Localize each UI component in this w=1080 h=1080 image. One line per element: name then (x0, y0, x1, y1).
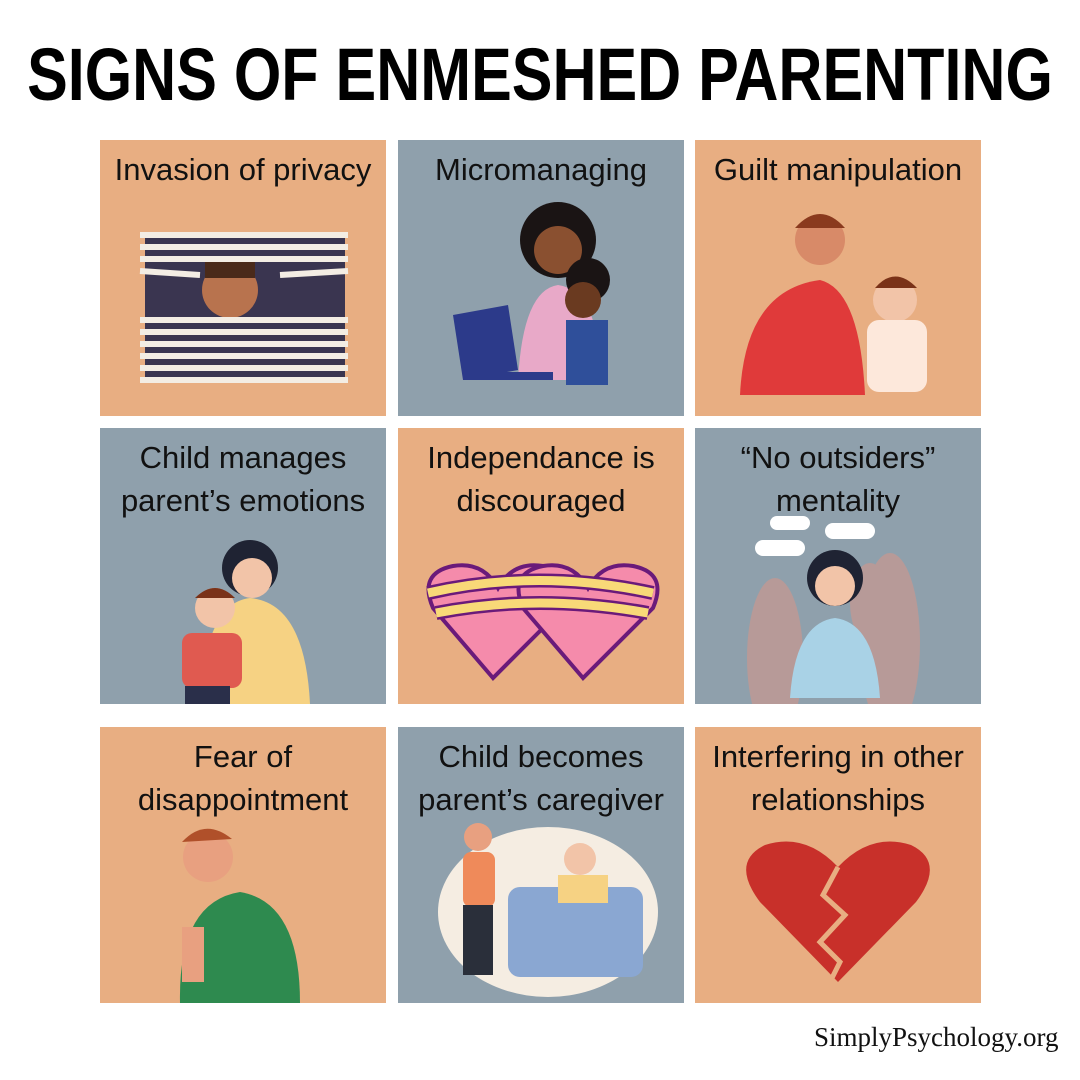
icon: broken heart (746, 842, 930, 982)
caption: Fear of (194, 739, 292, 774)
caption: discouraged (457, 483, 625, 518)
caption: Child manages (140, 440, 346, 475)
caption (741, 440, 935, 518)
caption: parent’s emotions (121, 483, 365, 518)
caption: Child becomes (438, 739, 644, 774)
icon: caregiving bed scene (438, 823, 658, 997)
caption: disappointment (138, 782, 348, 817)
caption (121, 440, 365, 518)
caption (712, 739, 964, 817)
icon: tied hearts (426, 563, 660, 681)
icon: blinds (140, 232, 348, 383)
icon: girl with shadows (747, 516, 920, 704)
caption: Interfering in other (712, 739, 964, 774)
caption: Invasion of privacy (115, 152, 371, 187)
caption (138, 739, 348, 817)
panel: guilt manipulation (695, 140, 981, 416)
panel: child manages emotions (100, 428, 386, 704)
panel: independence discouraged (398, 428, 684, 704)
caption: relationships (751, 782, 925, 817)
caption: “No outsiders” (741, 440, 935, 475)
icon: parent and child at laptop (453, 202, 610, 385)
footer: source: SimplyPsychology.org (814, 1022, 1059, 1052)
panel: fear of disappointment (100, 727, 386, 1003)
panel: invasion of privacy (100, 140, 386, 416)
caption (418, 739, 664, 817)
caption: Guilt manipulation (714, 152, 962, 187)
panel: micromanaging (398, 140, 684, 416)
icon: hug (182, 540, 310, 704)
caption: parent’s caregiver (418, 782, 664, 817)
caption (427, 440, 655, 518)
icon: scolding parent (740, 214, 927, 395)
icon: sad person (180, 828, 300, 1003)
panel: child becomes caregiver (398, 727, 684, 1003)
caption: mentality (776, 483, 900, 518)
caption: Independance is (427, 440, 655, 475)
panel: no outsiders (695, 428, 981, 704)
caption: Micromanaging (435, 152, 647, 187)
title: SIGNS OF ENMESHED PARENTING (27, 33, 1053, 116)
panel: interfering in relationships (695, 727, 981, 1003)
